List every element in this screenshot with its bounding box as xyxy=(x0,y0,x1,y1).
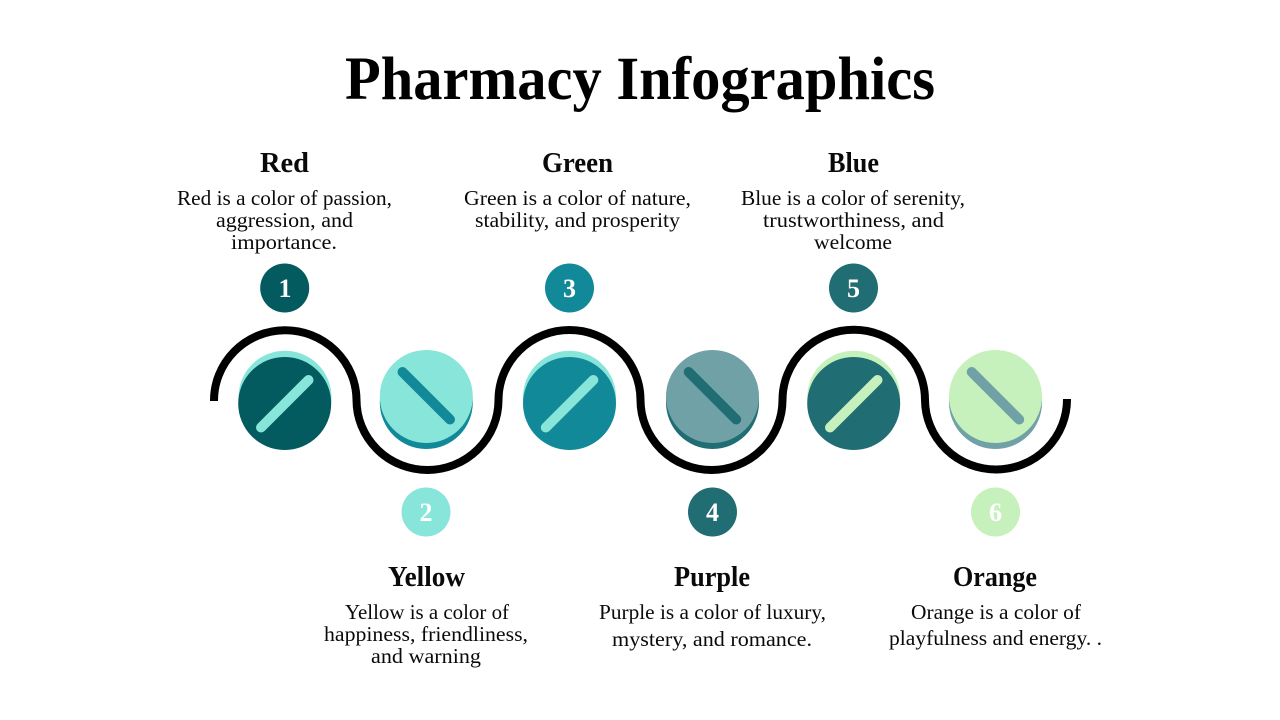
text block: Orange: Orange is a color of xyxy=(911,600,1081,624)
text block: Green: stability, and prosperity xyxy=(475,208,681,232)
text block: Blue: Blue xyxy=(828,148,879,179)
pill 2 xyxy=(380,350,473,449)
number badge 2: 2 xyxy=(420,498,432,527)
text block: Purple: Purple is a color of luxury, xyxy=(599,600,826,624)
number badge 3: 3 xyxy=(563,274,576,303)
number badge 4 xyxy=(688,488,737,536)
text block: Red: importance. xyxy=(231,230,337,254)
text block: Blue: trustworthiness, and xyxy=(763,208,945,232)
title: Pharmacy Infographics xyxy=(345,46,935,113)
text block: Orange: Orange xyxy=(953,562,1037,593)
text block: Blue: welcome xyxy=(814,230,892,254)
pill 4 xyxy=(666,350,759,449)
text block: Purple: Purple xyxy=(674,562,750,593)
pill 6 xyxy=(949,350,1042,449)
text block: Green: Green is a color of nature, xyxy=(464,186,691,210)
text block: Blue xyxy=(741,148,965,254)
number badge 6 xyxy=(971,488,1020,536)
text block: Purple xyxy=(599,562,826,651)
number badge 6: 6 xyxy=(989,498,1002,527)
text block: Green xyxy=(464,148,691,232)
number badge 1: 1 xyxy=(278,274,292,303)
text block: Red xyxy=(177,148,392,254)
text block: Yellow: Yellow xyxy=(388,562,466,593)
text block: Yellow xyxy=(324,562,528,668)
text block: Red: Red is a color of passion, xyxy=(177,186,392,210)
text block: Yellow: and warning xyxy=(371,644,482,668)
text block: Green: Green xyxy=(542,148,613,179)
text block: Red: aggression, and xyxy=(216,208,354,232)
number badge 3 xyxy=(545,264,594,312)
pill 3 xyxy=(523,351,616,450)
text block: Purple: mystery, and romance. xyxy=(612,627,812,651)
text block: Yellow: happiness, friendliness, xyxy=(324,622,528,646)
text block: Blue: Blue is a color of serenity, xyxy=(741,186,965,210)
wavy connector line xyxy=(214,330,1067,470)
text block: Yellow: Yellow is a color of xyxy=(345,600,509,624)
pill 5 xyxy=(807,351,900,450)
number badge 1 xyxy=(260,264,309,312)
pill 1 xyxy=(238,351,332,450)
number badge 2 xyxy=(402,488,450,536)
number badge 5 xyxy=(829,264,878,312)
number badge 5: 5 xyxy=(847,274,860,303)
text block: Red: Red xyxy=(260,148,309,179)
text block: Orange xyxy=(889,562,1102,650)
text block: Orange: playfulness and energy. . xyxy=(889,626,1102,650)
number badge 4: 4 xyxy=(706,498,719,527)
